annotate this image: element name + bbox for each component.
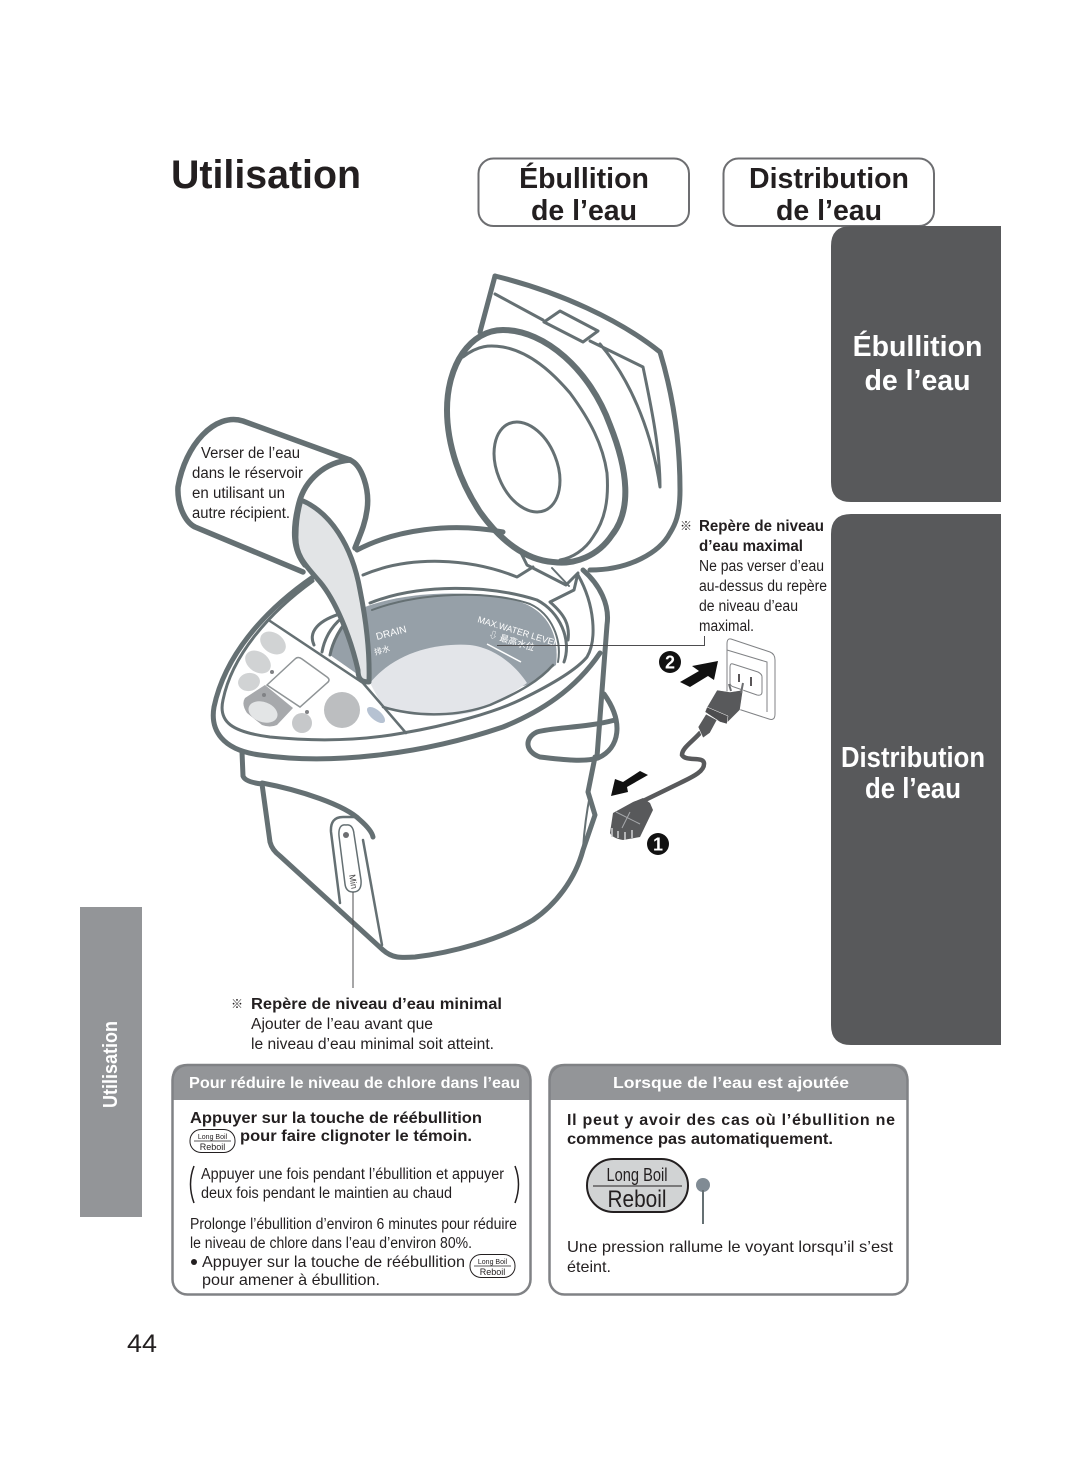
max level leader line <box>497 636 704 646</box>
icon: reboil key small: Long Boil <box>478 1259 508 1266</box>
min level note: ※ <box>231 997 243 1011</box>
min level note: Ajouter de l’eau avant que <box>251 1016 433 1033</box>
icon: indicator lamp <box>696 1178 710 1224</box>
pour instruction: autre récipient. <box>192 505 290 522</box>
number 2 <box>659 651 681 673</box>
panel: water added: éteint. <box>567 1259 611 1276</box>
back rim <box>357 528 503 550</box>
panel: chlorine: Prolonge l’ébullition d’environ 6 minutes pour réduire <box>190 1216 517 1233</box>
number 1 <box>647 833 669 855</box>
max level note <box>680 518 827 635</box>
icon: reboil key small <box>470 1254 515 1278</box>
max level note: Repère de niveau <box>699 518 824 535</box>
tank labels: ⇩ 最高水位 <box>487 628 536 653</box>
illustration: kettle with open lid <box>178 276 680 957</box>
pour instruction: dans le réservoir <box>192 465 303 482</box>
icon: reboil key small: Reboil <box>480 1267 505 1277</box>
min level note <box>231 996 502 1053</box>
max level note: de niveau d’eau <box>699 598 798 615</box>
max level note: Ne pas verser d’eau <box>699 558 824 575</box>
panel: chlorine: Appuyer une fois pendant l’ébullition et appuyer <box>201 1166 504 1183</box>
panel: chlorine: le niveau de chlore dans l’eau d’environ 80%. <box>190 1235 472 1252</box>
panel heading: Lorsque de l’eau est ajoutée <box>613 1075 849 1092</box>
step box: boiling: Ébullition <box>519 163 649 195</box>
water level window <box>331 817 382 945</box>
arrow: unplug <box>611 771 648 796</box>
kettle body <box>242 752 595 957</box>
number 1: 1 <box>653 834 663 854</box>
panel: chlorine: pour amener à ébullition. <box>202 1272 380 1289</box>
min level note: le niveau d’eau minimal soit atteint. <box>251 1036 494 1053</box>
side tab: boiling: de l’eau <box>864 365 971 397</box>
panel: water added: Une pression rallume le voyant lorsqu’il s’est <box>567 1239 894 1256</box>
step box: dispensing: de l’eau <box>776 195 882 227</box>
wall socket <box>727 639 775 719</box>
step box: boiling <box>478 158 689 227</box>
panel heading: Pour réduire le niveau de chlore dans l’eau <box>189 1075 520 1092</box>
number 2: 2 <box>665 652 675 672</box>
tank labels: MAX.WATER LEVEL <box>476 614 560 648</box>
panel: chlorine: Appuyer sur la touche de réébullition <box>202 1254 465 1271</box>
water surface <box>370 645 527 716</box>
section sidebar <box>80 907 142 1217</box>
panel: chlorine: pour faire clignoter le témoin. <box>240 1128 472 1145</box>
page number: 44 <box>127 1330 157 1358</box>
step box: boiling: de l’eau <box>531 195 637 227</box>
panel: water added <box>549 1064 908 1294</box>
title: Utilisation <box>171 153 361 197</box>
water stream <box>296 500 369 682</box>
icon: reboil key: Long Boil <box>198 1134 228 1141</box>
min level note: Repère de niveau d’eau minimal <box>251 996 502 1013</box>
icon: reboil key: Reboil <box>200 1142 225 1152</box>
lid back shell <box>495 276 680 570</box>
side seam <box>583 795 590 848</box>
step box: dispensing <box>724 158 934 227</box>
jug <box>178 420 350 572</box>
pour instruction: Verser de l’eau <box>201 445 300 462</box>
side tab: boiling: Ébullition <box>853 331 982 363</box>
tank rims <box>370 588 566 662</box>
power cord <box>610 683 743 840</box>
lid centre ellipse <box>482 412 572 522</box>
tank labels: DRAIN <box>375 624 408 643</box>
handle <box>528 694 617 760</box>
max level note: au-dessus du repère <box>699 578 827 595</box>
section sidebar: Utilisation <box>100 1021 122 1108</box>
arrow: plug in <box>680 661 718 687</box>
lid disc <box>447 330 625 563</box>
side tab: boiling <box>831 226 1001 502</box>
side tab: dispensing: de l’eau <box>865 773 961 805</box>
icon: reboil key <box>190 1130 235 1152</box>
max level note: maximal. <box>699 618 754 635</box>
min level leader line <box>352 892 354 988</box>
icon: long boil button: Long Boil <box>606 1165 668 1185</box>
max level note: d’eau maximal <box>699 538 803 555</box>
pour instruction: en utilisant un <box>192 485 285 502</box>
side tab: dispensing: Distribution <box>841 742 985 774</box>
water level window: Min <box>347 874 359 890</box>
pour instruction <box>192 445 303 522</box>
tank labels <box>373 614 560 662</box>
panel: water added: Il peut y avoir des cas où l’ébullition ne <box>567 1112 895 1129</box>
kettle rim <box>213 577 600 759</box>
panel: water added: commence pas automatiquement. <box>567 1131 833 1148</box>
side tab: dispensing <box>831 514 1001 1045</box>
panel: chlorine: deux fois pendant le maintien au chaud <box>201 1185 452 1202</box>
panel: chlorine <box>172 1064 531 1294</box>
control panel <box>237 621 406 733</box>
step box: dispensing: Distribution <box>749 163 909 195</box>
icon: long boil button <box>587 1159 688 1213</box>
icon: long boil button: Reboil <box>608 1186 666 1213</box>
panel: chlorine: Appuyer sur la touche de réébullition <box>190 1110 482 1127</box>
tank labels: 排水 <box>373 643 391 657</box>
max level note: ※ <box>680 519 692 533</box>
inner tank <box>330 594 557 700</box>
